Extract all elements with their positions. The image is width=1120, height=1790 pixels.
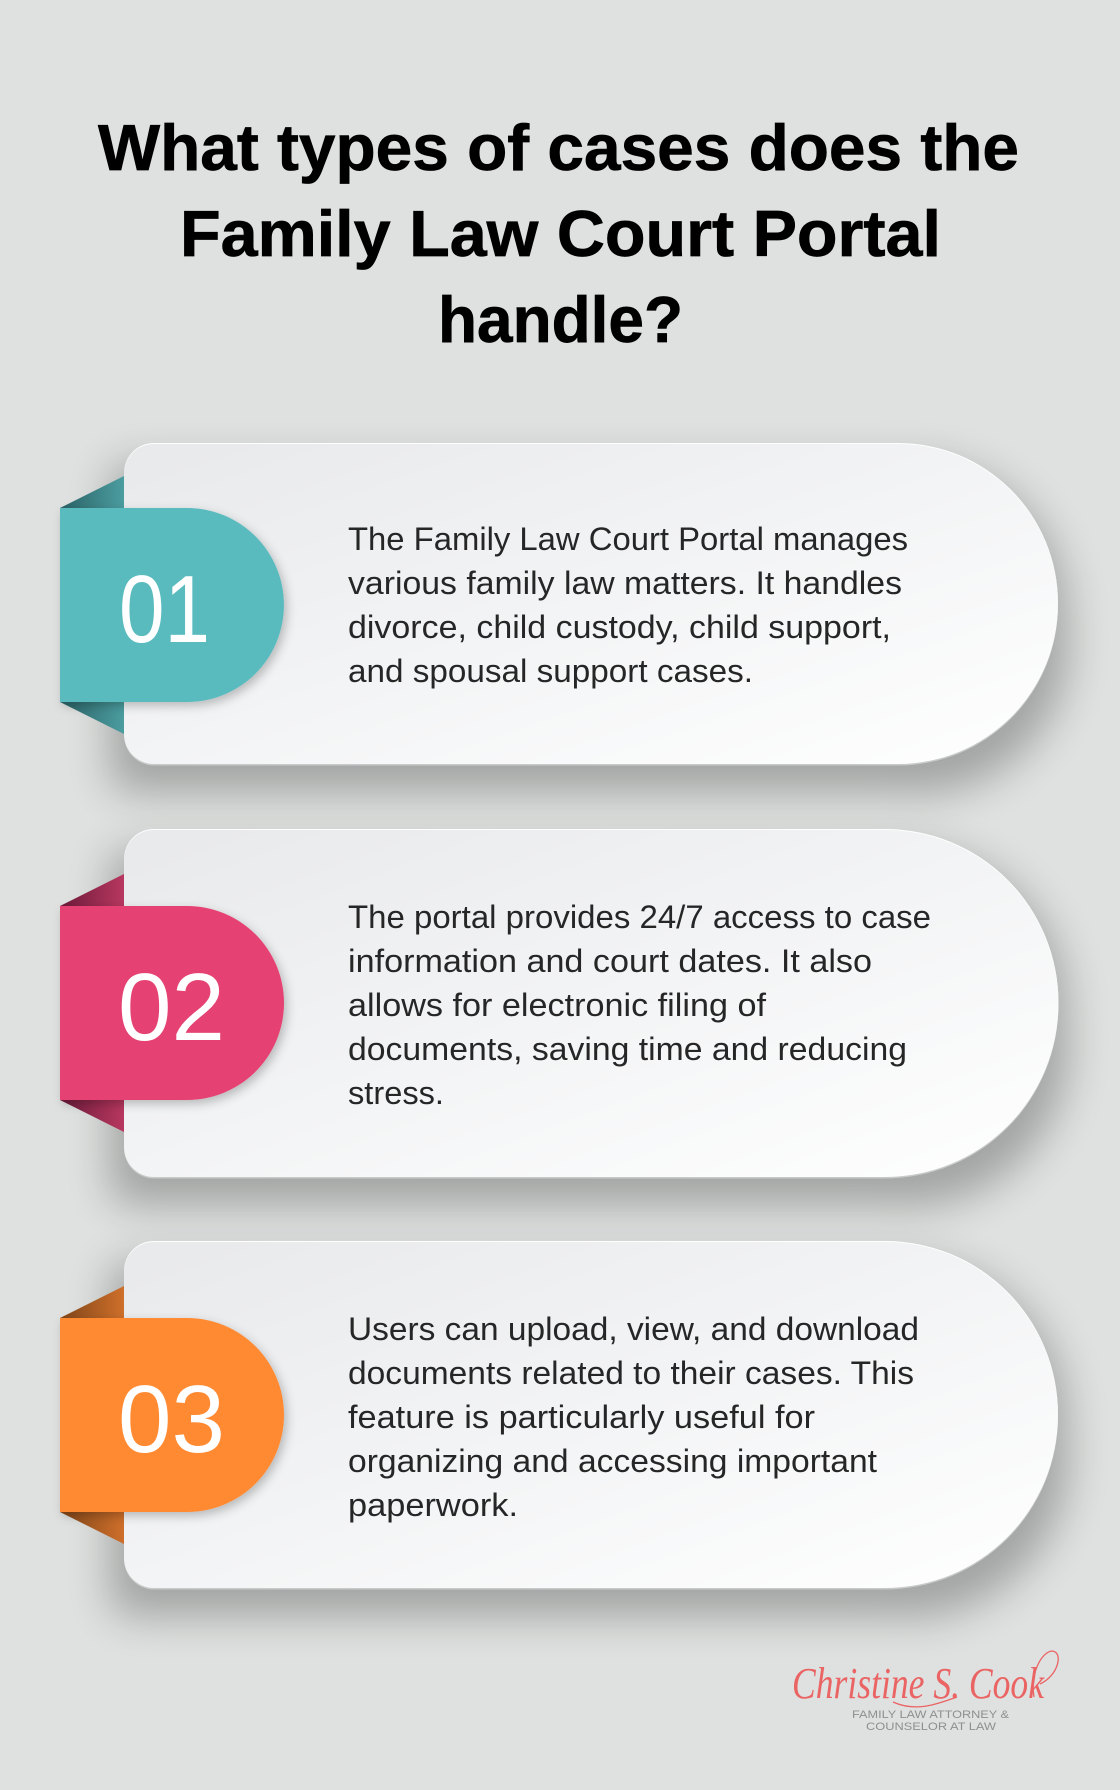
panel: step 02: [60, 829, 1068, 1206]
title: What types of cases does the: [98, 111, 1019, 184]
text 02: stress.: [348, 1075, 444, 1111]
text 02: [348, 899, 931, 1111]
panel: step 01: [60, 443, 1068, 793]
fold top 02: [60, 874, 124, 906]
fold top 01: [60, 476, 124, 508]
number 01: 01: [119, 556, 210, 663]
card edge highlight 02: [124, 829, 1058, 1176]
text 03: documents related to their cases. This: [348, 1355, 914, 1391]
card shadow 02: [110, 849, 1068, 1206]
badge 03: [60, 1318, 284, 1512]
card edge lowlight 02: [124, 832, 1058, 1178]
panel: step 03: [60, 1241, 1068, 1617]
text 03: [348, 1311, 919, 1523]
text 03: Users can upload, view, and download: [348, 1311, 919, 1347]
text 01: The Family Law Court Portal manages: [348, 521, 908, 557]
text 02: The portal provides 24/7 access to case: [348, 899, 931, 935]
logo tagline: COUNSELOR AT LAW: [866, 1721, 997, 1733]
text 01: [348, 521, 908, 689]
card edge lowlight 03: [124, 1244, 1058, 1590]
card shadow 01: [110, 463, 1068, 793]
card 01: [124, 444, 1058, 764]
text 01: various family law matters. It handles: [348, 565, 902, 601]
text 01: and spousal support cases.: [348, 653, 753, 689]
text 02: information and court dates. It also: [348, 943, 872, 979]
logo tagline: [852, 1709, 1010, 1733]
logo tagline: FAMILY LAW ATTORNEY &: [852, 1709, 1010, 1721]
badge 01: [60, 508, 284, 702]
text 01: divorce, child custody, child support,: [348, 609, 891, 645]
card edge highlight 03: [124, 1241, 1058, 1587]
card shadow 03: [110, 1261, 1068, 1617]
card edge lowlight 01: [124, 446, 1058, 766]
card 02: [124, 830, 1058, 1177]
card 03: [124, 1242, 1058, 1588]
logo: [792, 1651, 1058, 1733]
logo: Christine S. Cook: [792, 1659, 1045, 1708]
text 02: allows for electronic filing of: [348, 987, 767, 1023]
title: handle?: [438, 283, 683, 356]
badge 02: [60, 906, 284, 1100]
fold bottom 01: [60, 702, 124, 734]
number 03: 03: [118, 1366, 225, 1473]
text 03: paperwork.: [348, 1487, 518, 1523]
text 03: feature is particularly useful for: [348, 1399, 815, 1435]
fold bottom 03: [60, 1512, 124, 1544]
card edge highlight 01: [124, 443, 1058, 763]
title: [98, 111, 1019, 356]
title: Family Law Court Portal: [180, 197, 941, 270]
number 02: 02: [118, 954, 225, 1061]
fold top 03: [60, 1286, 124, 1318]
fold bottom 02: [60, 1100, 124, 1132]
text 02: documents, saving time and reducing: [348, 1031, 907, 1067]
text 03: organizing and accessing important: [348, 1443, 877, 1479]
logo swoosh and k loop: [893, 1651, 1058, 1707]
